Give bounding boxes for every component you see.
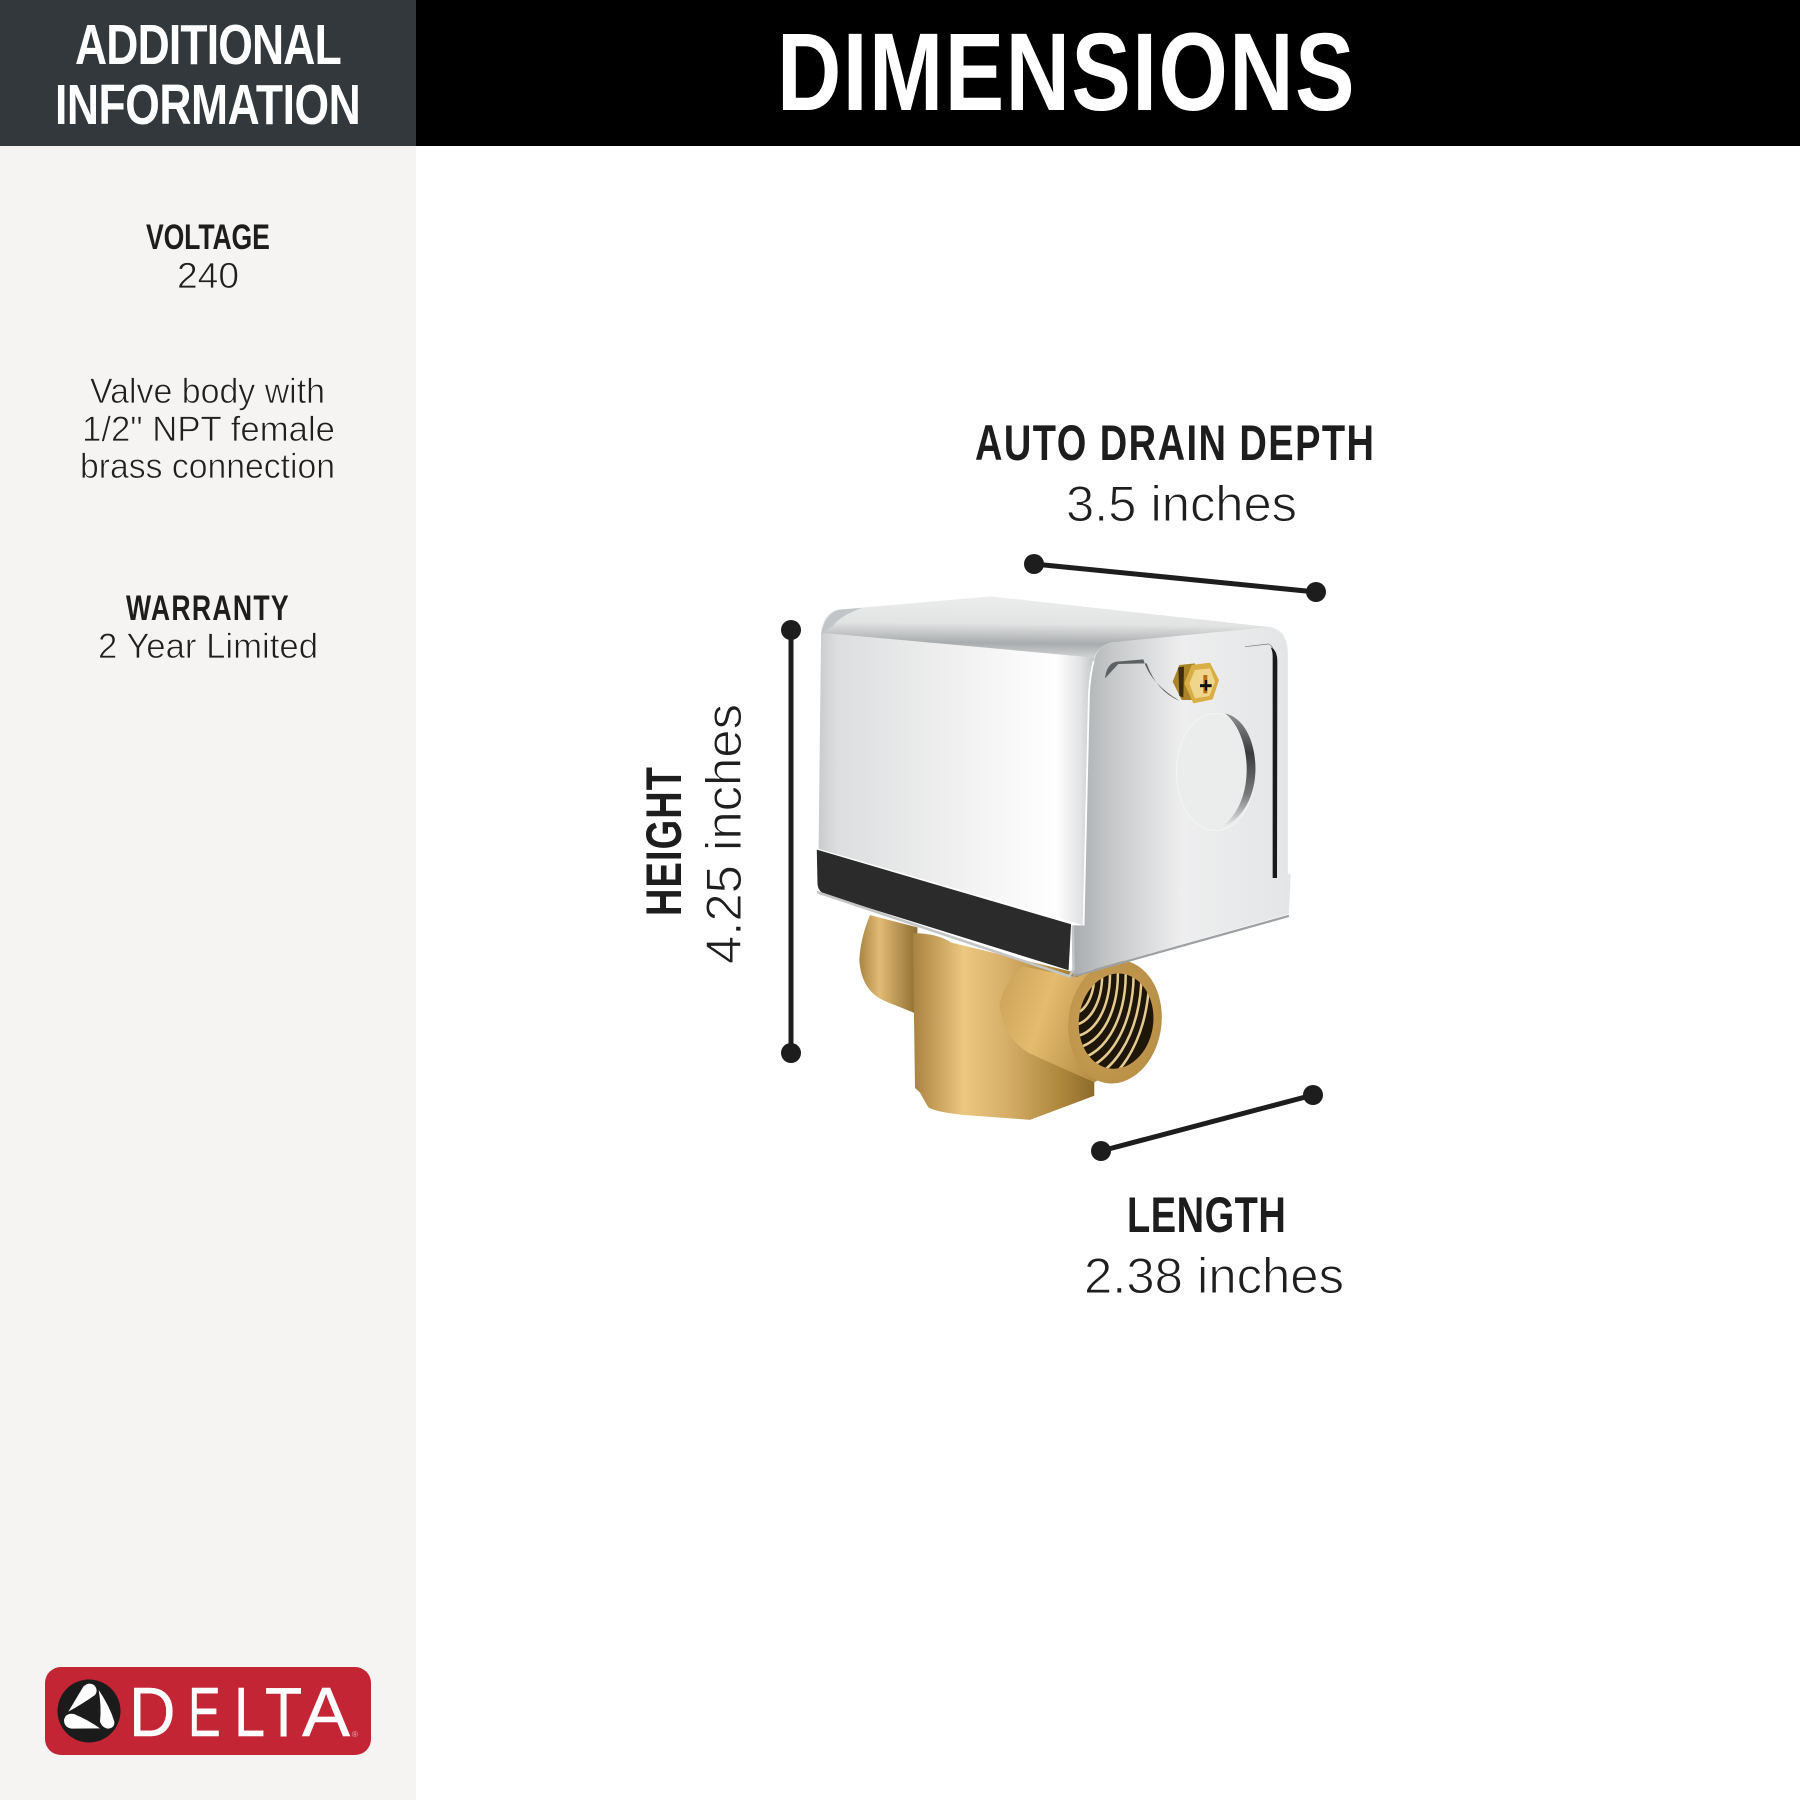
text block: warranty: 2 Year Limited (98, 627, 318, 666)
text block: warranty (98, 588, 318, 666)
cover: panel notch (1105, 659, 1180, 701)
header bar: additional information (0, 0, 416, 146)
heading: dimensions: DIMENSIONS (777, 11, 1355, 134)
brass: threaded opening (1068, 960, 1162, 1084)
dimension line: height (781, 620, 801, 1063)
label: auto drain depth: AUTO DRAIN DEPTH (975, 416, 1374, 471)
text block: valve body description: 1/2" NPT female (82, 410, 335, 449)
text block: voltage (146, 217, 270, 296)
label: auto drain depth (975, 416, 1374, 532)
label: height: HEIGHT (637, 767, 692, 916)
text block: warranty: WARRANTY (126, 588, 289, 628)
label: height: 4.25 inches (696, 704, 752, 964)
brass: centre column (913, 933, 1094, 1120)
text block: voltage: VOLTAGE (146, 217, 270, 257)
text block: voltage: 240 (177, 255, 239, 296)
logo: Delta: D (129, 1674, 176, 1752)
dimension line: length (1091, 1085, 1323, 1161)
logo: Delta: A (302, 1674, 351, 1752)
background panel: additional information sidebar (0, 146, 416, 1800)
label: height (637, 704, 752, 964)
label: length (1084, 1188, 1344, 1304)
cover: front face (819, 633, 1094, 925)
cover: knockout circle (1176, 713, 1255, 831)
heading: additional information: INFORMATION (55, 73, 361, 136)
label: length: 2.38 inches (1084, 1248, 1344, 1304)
cover: brass screw (1173, 663, 1219, 703)
logo: Delta: ® (352, 1730, 358, 1739)
logo: Delta: L (234, 1674, 265, 1751)
text block: valve body description: Valve body with (90, 372, 325, 411)
cover details: side panel, knockout and screw (1105, 644, 1277, 878)
logo: Delta: E (188, 1672, 221, 1751)
header bar: dimensions (416, 0, 1800, 146)
label: auto drain depth: 3.5 inches (1066, 476, 1297, 532)
cover: black strip (817, 850, 1071, 970)
brass: rear stub (859, 915, 917, 1013)
dimension line: depth (1024, 554, 1326, 602)
text block: valve body description: brass connection (80, 447, 335, 486)
heading: additional information (55, 13, 361, 136)
heading: additional information: ADDITIONAL (75, 13, 342, 76)
product image: valve actuator with brass body (817, 596, 1291, 1120)
cover: slot (1245, 644, 1275, 878)
logo: Delta: T (265, 1673, 302, 1751)
logo: Delta (45, 1667, 371, 1755)
brass: outlet stub (1000, 960, 1141, 1082)
text block: valve body description (80, 372, 335, 486)
label: length: LENGTH (1127, 1188, 1286, 1243)
cover: top face (821, 596, 1282, 661)
cover: side face (1072, 627, 1291, 975)
